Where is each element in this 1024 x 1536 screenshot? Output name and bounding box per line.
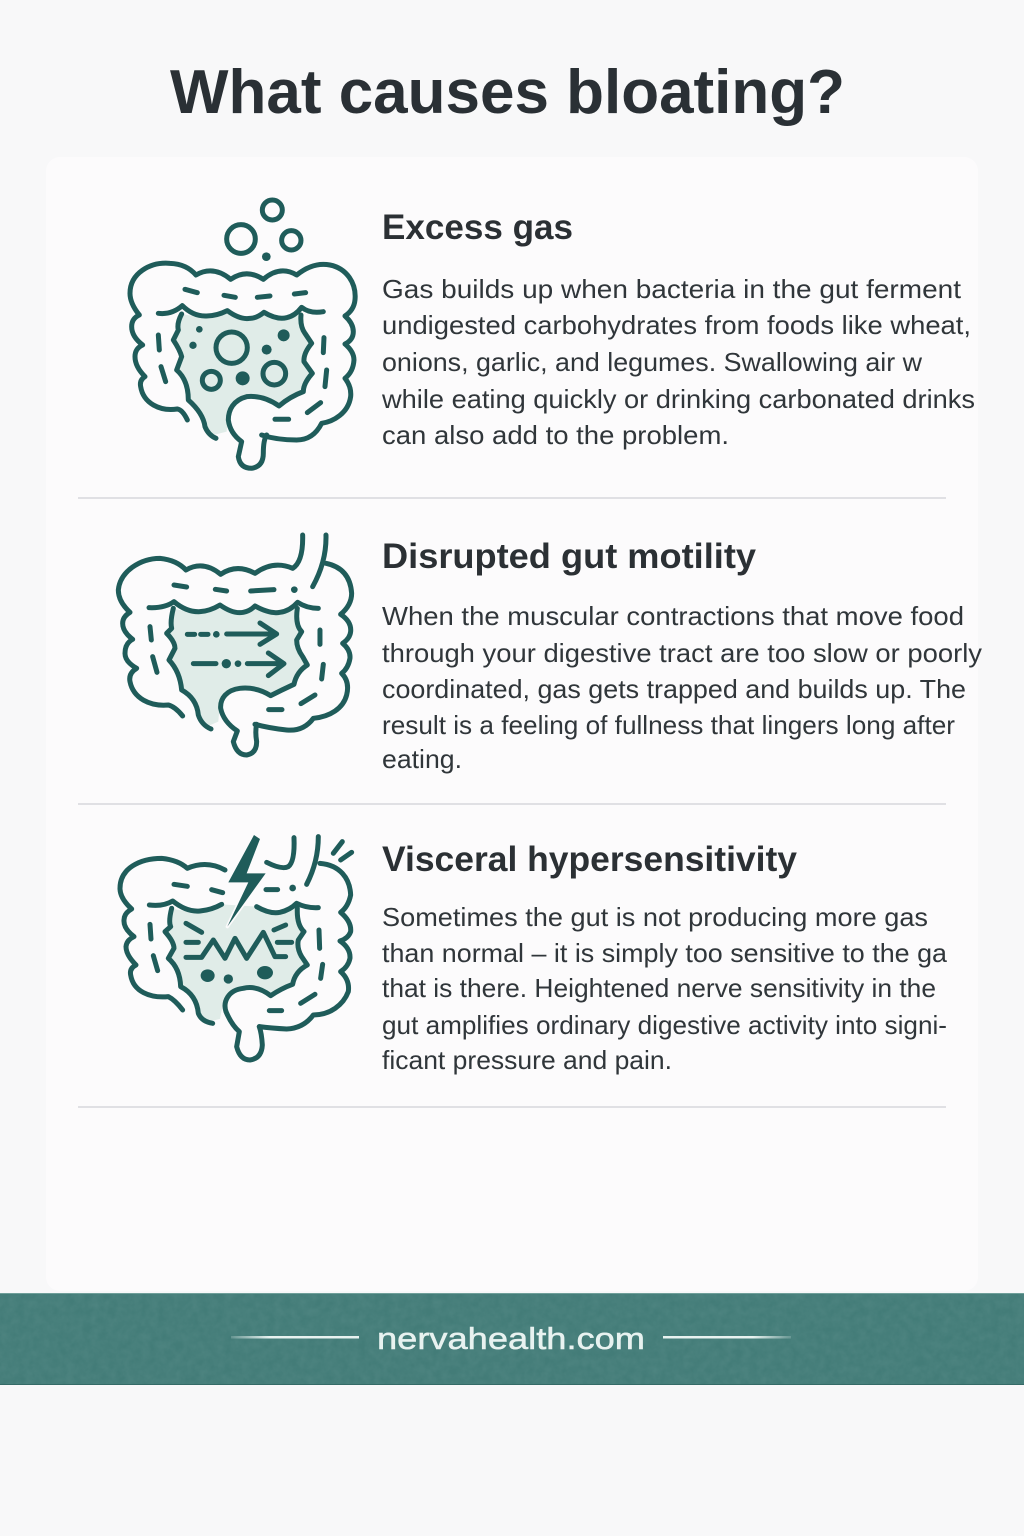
pain signal zigzag (186, 923, 292, 958)
title: What causes bloating? (170, 58, 845, 127)
icon: intestine with motility arrows (118, 535, 352, 755)
icon: intestine with lightning bolt (120, 835, 352, 1060)
section: excess gas (130, 200, 975, 468)
arrow: upper motility (187, 623, 277, 644)
text block: disrupted gut motility: through your digestive tract are too slow or poorly (382, 638, 982, 668)
text block: excess gas (381, 274, 975, 450)
text block: visceral hypersensitivity: Sometimes the gut is not producing more gas (382, 902, 928, 932)
footer banner (0, 1293, 1024, 1385)
text block: visceral hypersensitivity: gut amplifies ordinary digestive activity into signi- (382, 1010, 947, 1040)
website url: nervahealth.com (377, 1321, 645, 1356)
text block: disrupted gut motility: eating. (382, 744, 462, 774)
heading: excess gas: Excess gas (382, 208, 573, 247)
text block: excess gas: undigested carbohydrates from foods like wheat, (382, 310, 971, 340)
text block: excess gas: Gas builds up when bacteria in the gut ferment (382, 274, 962, 304)
heading: disrupted gut motility: Disrupted gut motility (382, 537, 757, 576)
text block: disrupted gut motility: result is a feeling of fullness that lingers long after (382, 710, 955, 740)
arrow: lower motility (193, 653, 284, 676)
section: disrupted gut motility (118, 535, 982, 774)
text block: disrupted gut motility: When the muscular contractions that move food (382, 601, 964, 631)
text block: visceral hypersensitivity: ficant pressure and pain. (382, 1045, 672, 1075)
icon: intestine with gas bubbles (130, 200, 355, 468)
text block: visceral hypersensitivity: than normal – it is simply too sensitive to the ga (382, 938, 948, 968)
icon: lightning bolt (227, 835, 266, 927)
text block: excess gas: can also add to the problem. (382, 420, 729, 450)
section: visceral hypersensitivity (120, 835, 948, 1075)
text block: visceral hypersensitivity (382, 902, 948, 1075)
text block: excess gas: onions, garlic, and legumes. Swallowing air w (382, 347, 922, 377)
heading: visceral hypersensitivity: Visceral hypersensitivity (382, 840, 798, 879)
text block: disrupted gut motility: coordinated, gas gets trapped and builds up. The (382, 674, 966, 704)
text block: excess gas: while eating quickly or drinking carbonated drinks (381, 384, 975, 414)
panel: causes (46, 157, 982, 1291)
text block: disrupted gut motility (382, 601, 982, 774)
text block: visceral hypersensitivity: that is there. Heightened nerve sensitivity in the (382, 973, 936, 1003)
